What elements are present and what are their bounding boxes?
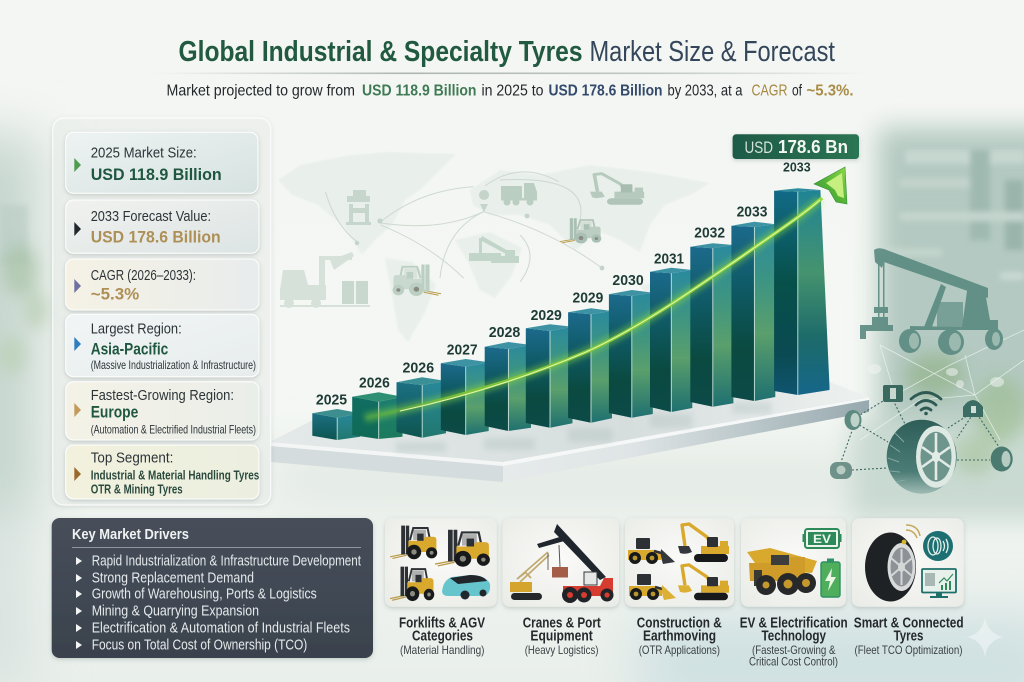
subtitle: USD 178.6 Billion: [548, 82, 662, 100]
icon: excavator top: [678, 524, 729, 562]
icon: EV label: [802, 529, 842, 548]
growth arrow: [365, 167, 847, 418]
icon: wheel loader bottom: [629, 574, 676, 600]
icon: forklift top right: [435, 530, 490, 567]
bar 2030: [609, 272, 653, 418]
card: 2025 market size: 2025 Market Size:: [91, 145, 197, 162]
bar 2032: [690, 225, 733, 407]
panel: smart and connected tyres: Smart & Connected: [854, 615, 964, 631]
card: largest region: [66, 314, 259, 377]
card: 2033 forecast value: USD 178.6 Billion: [91, 228, 221, 247]
subtitle: [166, 82, 854, 100]
panel: key figures: [53, 118, 271, 505]
icon: reach stacker silhouette: [860, 248, 1003, 355]
bar 2028: 2028: [489, 324, 520, 341]
subtitle: CAGR: [752, 82, 788, 100]
panel: key market drivers: Electrification & Automation of Industrial Fleets: [92, 620, 350, 636]
icon: AGV: [442, 575, 490, 600]
platform: [270, 382, 869, 482]
panel: cranes and port equipment: (Heavy Logistics): [525, 643, 598, 657]
icon: excavator bottom: [678, 565, 729, 600]
icon: lattice crane: [510, 552, 549, 600]
card: 2033 forecast value: [66, 200, 259, 253]
bar 2029: [526, 307, 572, 428]
panel: key market drivers: Rapid Industrialization & Infrastructure Development: [92, 554, 361, 570]
panel: key market drivers: Key Market Drivers: [72, 527, 189, 543]
panel: key market drivers: Mining & Quarrying Expansion: [92, 604, 259, 620]
card: largest region: Largest Region:: [91, 320, 182, 337]
icon: map excavator: [590, 174, 644, 205]
bar 2029 second: [568, 289, 612, 423]
panel: construction and earthmoving: Construction &: [637, 615, 722, 631]
bar 2029 second: 2029: [572, 289, 603, 306]
panel: forklifts and AGV: [385, 518, 497, 657]
icon: map crawler crane: [469, 236, 519, 263]
title: Market Size & Forecast: [590, 36, 835, 68]
panel: EV and electrification: Technology: [762, 629, 826, 645]
panel: cranes and port equipment: Equipment: [530, 629, 593, 645]
panel: EV and electrification: EV & Electrification: [740, 615, 848, 631]
bar 2031: [650, 250, 692, 412]
card: largest region: Asia-Pacific: [91, 339, 168, 358]
subtitle: by 2033, at a: [668, 82, 743, 100]
bar 2026 second: [396, 359, 446, 438]
icon: monitoring display: [922, 569, 956, 598]
icon: tyre node left: [844, 410, 862, 430]
value badge: USD: [744, 138, 773, 157]
card: top segment: OTR & Mining Tyres: [91, 481, 183, 496]
icon: cargo container: [552, 545, 568, 578]
bar 2026: [352, 375, 402, 439]
bar 2026 second: 2026: [402, 359, 434, 376]
sparkle: [967, 617, 1003, 657]
bar 2025: 2025: [316, 391, 347, 408]
icon: lock node: [963, 400, 983, 417]
panel: EV and electrification: Critical Cost Control): [749, 655, 838, 669]
icon: map forklift south: [393, 264, 441, 296]
bar 2030: 2030: [612, 272, 644, 289]
smart tyre network: [830, 385, 1013, 494]
icon: tyre node right: [991, 446, 1013, 472]
panel: key market drivers: [52, 518, 373, 658]
icon: EV label: EV: [813, 534, 831, 546]
bar 2033 tallest: [774, 161, 830, 395]
bar 2025: [312, 391, 360, 440]
card: top segment: Top Segment:: [91, 449, 173, 466]
bar chart: [312, 161, 830, 440]
bar 2026: 2026: [359, 375, 390, 392]
world map backdrop: [278, 152, 710, 342]
card: 2025 market size: [66, 132, 258, 193]
bar 2032: 2032: [694, 225, 725, 242]
bar 2033: 2033: [737, 204, 767, 221]
panel: EV and electrification: [740, 518, 848, 669]
icon: wheel loader top: [628, 538, 675, 564]
panel: key market drivers: Growth of Warehousing, Ports & Logistics: [92, 587, 317, 603]
panel: construction and earthmoving: [625, 518, 734, 657]
card: CAGR: ~5.3%: [91, 284, 139, 303]
panel: construction and earthmoving: Earthmoving: [643, 629, 716, 645]
bar 2031: 2031: [654, 250, 684, 267]
icon: sensor node: [883, 385, 903, 402]
card: CAGR: [66, 259, 259, 310]
card: CAGR: CAGR (2026–2033):: [91, 268, 196, 284]
panel: cranes and port equipment: [502, 518, 619, 657]
panel: smart and connected tyres: (Fleet TCO Optimization): [854, 643, 962, 657]
card: fastest growing region: (Automation & Electrified Industrial Fleets): [91, 422, 256, 436]
card: fastest growing region: Europe: [91, 403, 138, 422]
bar 2029: 2029: [531, 307, 562, 324]
card: fastest growing region: Fastest-Growing Region:: [91, 387, 234, 404]
bar 2028: [485, 324, 531, 431]
icon: battery: [821, 558, 840, 597]
card: largest region: (Massive Industrialization & Infrastructure): [91, 358, 256, 372]
card: top segment: Industrial & Material Handling Tyres: [91, 467, 259, 482]
icon: tyre node lower left: [830, 462, 852, 479]
icon: forklift bottom left: [390, 567, 434, 601]
card: top segment: [66, 445, 259, 499]
icon: smart tyre: [887, 420, 957, 494]
icon: map yard loader and pallets: [280, 252, 370, 308]
panel: construction and earthmoving: (OTR Applications): [639, 643, 720, 657]
icon: map forklift east: [560, 218, 601, 243]
subtitle: Market projected to grow from: [166, 82, 355, 100]
subtitle: USD 118.9 Billion: [362, 82, 476, 100]
panel: forklifts and AGV: Forklifts & AGV: [399, 615, 485, 631]
icon: connected tyre: [865, 525, 920, 602]
panel: forklifts and AGV: (Material Handling): [400, 643, 485, 657]
icon: forklift top left: [390, 526, 437, 559]
panel: key market drivers: Focus on Total Cost of Ownership (TCO): [92, 637, 307, 653]
panel: smart and connected tyres: [852, 518, 964, 657]
panel: cranes and port equipment: Cranes & Port: [523, 615, 601, 631]
card: fastest growing region: [66, 382, 259, 440]
value badge: [733, 134, 859, 159]
icon: map dump truck: [501, 183, 537, 206]
panel: forklifts and AGV: Categories: [412, 629, 473, 645]
icon: tyre sensor badge: [923, 531, 953, 561]
card: 2033 forecast value: 2033 Forecast Value:: [91, 208, 211, 225]
subtitle: of: [792, 82, 802, 100]
panel: EV and electrification: (Fastest-Growing &: [752, 643, 835, 657]
bar 2027: 2027: [447, 341, 478, 358]
icon: wifi signal: [911, 392, 941, 415]
panel: smart and connected tyres: Tyres: [894, 629, 923, 645]
bar 2033 tallest: 2033: [783, 161, 811, 175]
bar 2033: [731, 204, 775, 401]
bar 2027: [441, 341, 489, 435]
panel: key market drivers: Strong Replacement Demand: [92, 570, 254, 586]
value badge: 178.6 Bn: [778, 137, 848, 157]
title: Global Industrial & Specialty Tyres: [178, 36, 582, 68]
icon: reach stacker: [537, 524, 614, 603]
subtitle: in 2025 to: [482, 82, 544, 100]
icon: map press machine: [346, 190, 371, 225]
icon: EV mining truck: [747, 548, 817, 595]
card: 2025 market size: USD 118.9 Billion: [91, 165, 222, 184]
subtitle: ~5.3%.: [806, 82, 854, 100]
